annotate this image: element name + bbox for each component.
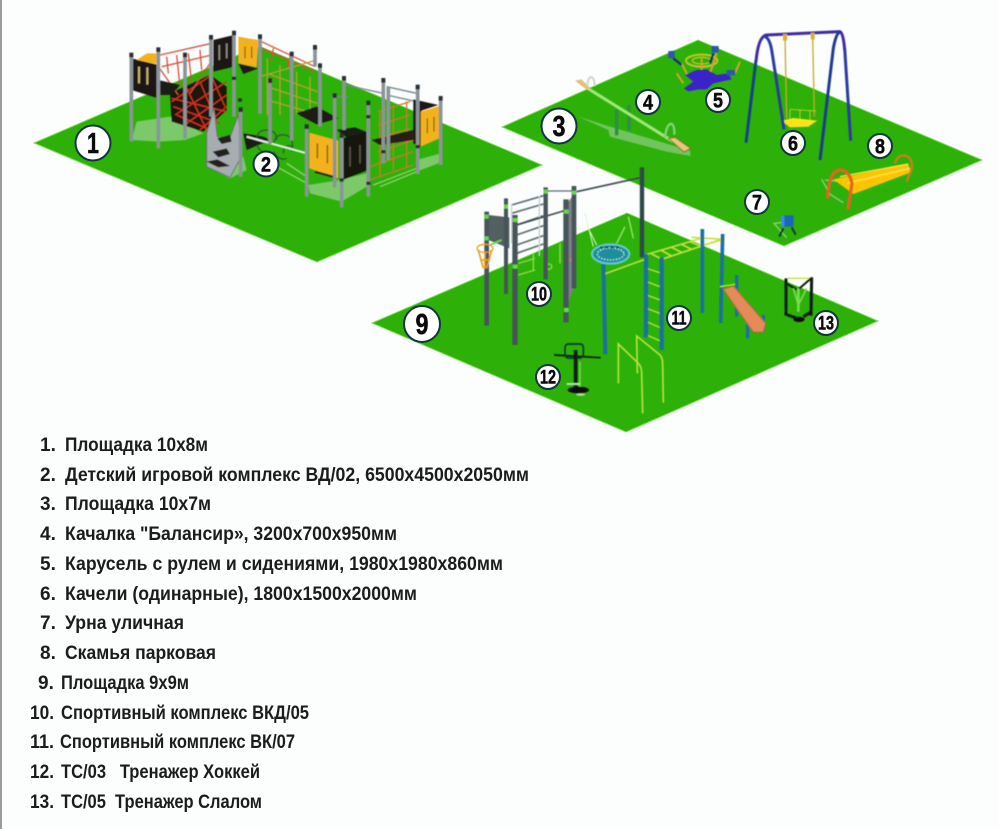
- badge 11: [667, 306, 691, 330]
- badge 7: 7: [752, 192, 762, 214]
- badge 2: [254, 152, 278, 176]
- legend item 8: 8.: [40, 643, 56, 664]
- legend item 1: Площадка 10х8м: [65, 435, 208, 456]
- yellow-orange nets: [260, 58, 317, 115]
- legend item 6: Качели (одинарные), 1800х1500х2000мм: [65, 584, 417, 605]
- badge 13: 13: [818, 314, 834, 334]
- incline bench: [723, 275, 766, 338]
- legend item 3: Площадка 10х7м: [65, 494, 211, 515]
- badge 12: 12: [540, 368, 556, 388]
- sports complex 11: [602, 229, 737, 413]
- waste bin 7: [773, 215, 796, 238]
- dark net: [170, 75, 227, 132]
- badge 2: 2: [261, 154, 271, 176]
- legend item 9: 9.: [38, 673, 54, 694]
- legend item 8: Скамья парковая: [65, 643, 216, 664]
- stairs: [207, 108, 242, 177]
- panel: playground 3 with swing, carousel, seesaw, bench and bin: [502, 32, 982, 246]
- legend item 10: 10.: [30, 703, 54, 724]
- seesaw 4: [575, 77, 691, 156]
- badge 8: 8: [875, 136, 885, 158]
- carousel 5: [668, 46, 740, 91]
- legend item 6: 6.: [40, 584, 56, 605]
- legend item 4: Качалка "Балансир», 3200х700х950мм: [65, 524, 397, 545]
- badge 6: [781, 131, 805, 156]
- legend item 7: 7.: [40, 613, 56, 634]
- dark platforms: [296, 107, 338, 124]
- legend item 3: 3.: [40, 494, 56, 515]
- number badges: [76, 88, 892, 389]
- panel: playground 9 with sports complexes and trainers: [372, 167, 878, 432]
- park bench 8: [822, 155, 912, 209]
- green platform 3: [502, 40, 982, 246]
- panel: playground 1 with children's complex: [34, 31, 542, 262]
- legend item 13: ТС/05 Тренажер Слалом: [61, 792, 262, 813]
- trainer 12: [554, 344, 601, 396]
- badge 9: 9: [416, 309, 428, 341]
- legend item 7: Урна уличная: [65, 613, 184, 634]
- children's play complex 2: [129, 31, 443, 207]
- green platform 1: [34, 46, 542, 262]
- green platform 9: [372, 213, 878, 432]
- posts: [131, 32, 441, 207]
- sports complex 10: [477, 167, 642, 345]
- badge 8: [868, 134, 892, 158]
- badge 5: 5: [713, 90, 723, 112]
- badge 4: [636, 90, 660, 114]
- badge 3: 3: [552, 111, 566, 143]
- badge 1: 1: [87, 128, 99, 160]
- legend list: [30, 435, 529, 813]
- legend item 5: 5.: [40, 554, 56, 575]
- nest swing: [585, 213, 633, 264]
- legend item 2: 2.: [40, 465, 56, 486]
- badge 11: 11: [672, 308, 687, 330]
- legend item 2: Детский игровой комплекс ВД/02, 6500х4500х2050мм: [65, 465, 529, 486]
- legend item 1: 1.: [40, 435, 56, 456]
- rings: [257, 130, 293, 159]
- legend item 5: Карусель с рулем и сидениями, 1980х1980х860мм: [65, 554, 503, 575]
- badge 1: [76, 126, 110, 160]
- legend item 13: 13.: [30, 792, 54, 813]
- badge 3: [542, 108, 576, 144]
- badge 6: 6: [788, 132, 798, 156]
- trainer 13: [786, 277, 812, 322]
- black and yellow panels: [132, 58, 158, 98]
- legend item 10: Спортивный комплекс ВКД/05: [61, 703, 309, 724]
- legend item 11: Спортивный комплекс ВК/07: [60, 732, 295, 753]
- badge 4: 4: [643, 92, 653, 114]
- top ropes: [160, 42, 315, 87]
- legend item 9: Площадка 9х9м: [61, 673, 189, 694]
- legend item 11: 11.: [30, 732, 54, 753]
- badge 9: [404, 306, 440, 342]
- badge 10: 10: [531, 284, 547, 306]
- legend item 12: ТС/03 Тренажер Хоккей: [61, 762, 260, 783]
- badge 7: [745, 190, 769, 214]
- badge 5: [706, 88, 730, 112]
- legend item 4: 4.: [40, 524, 56, 545]
- legend item 12: 12.: [30, 762, 54, 783]
- swing 6: [746, 32, 851, 160]
